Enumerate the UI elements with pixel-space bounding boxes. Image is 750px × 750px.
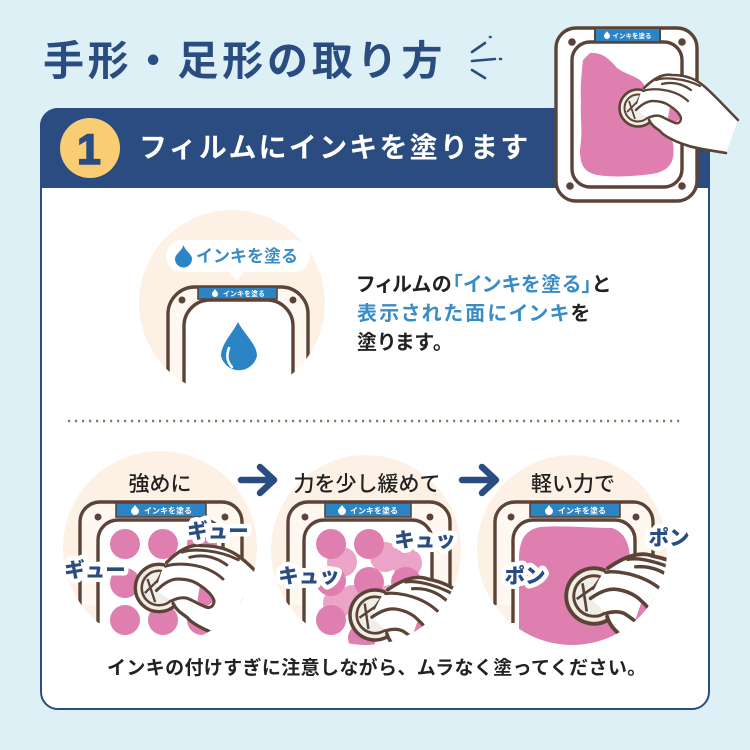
- scene 3: light touch: インキを塗る: [558, 506, 606, 516]
- sound label: kyutt right: キュッ: [394, 529, 456, 552]
- illustration: film with hand applying ink: [556, 28, 738, 201]
- scene 1: press hard: インキを塗る: [144, 506, 192, 516]
- step header band: [40, 108, 710, 188]
- title: 手形・足形の取り方: [43, 38, 446, 84]
- illustration: ink side of the film: [139, 210, 325, 400]
- panel: step 1: [41, 109, 709, 709]
- illustration: ink side of the film: インキを塗る: [223, 289, 265, 298]
- scene 3: light touch: [477, 455, 667, 645]
- sound label: pon right: ポン: [648, 527, 690, 550]
- description text: フィルムの「インキを塗る」と: [357, 273, 610, 296]
- sound label: gyuu left: ギュー: [64, 559, 126, 582]
- scene 2: ease off: インキを塗る: [350, 506, 398, 516]
- scene 2 heading: 力を少し緩めて: [294, 473, 440, 496]
- speech bubble: apply ink label: インキを塗る: [196, 247, 298, 266]
- arrow: [462, 467, 496, 493]
- step number badge: [60, 118, 120, 178]
- arrow: [241, 467, 274, 493]
- description text: [357, 273, 610, 354]
- scene 2: ease off: [271, 455, 461, 645]
- sound label: pon left: ポン: [504, 565, 546, 588]
- scene 1 heading: 強めに: [128, 473, 192, 496]
- scene 1: press hard: [63, 451, 257, 635]
- scene 3 heading: 軽い力で: [531, 473, 615, 496]
- step heading: フィルムにインキを塗ります: [139, 132, 530, 163]
- description text: 塗ります。: [357, 331, 444, 354]
- caption: インキの付けすぎに注意しながら、ムラなく塗ってください。: [107, 656, 647, 679]
- illustration: film with hand applying ink: インキを塗る: [612, 31, 652, 40]
- step number badge: 1: [77, 126, 101, 174]
- icon: emphasis strokes: [472, 37, 501, 78]
- speech bubble: apply ink label: [166, 240, 310, 281]
- sound label: gyuu right: ギュー: [187, 520, 249, 543]
- sound label: kyutt left: キュッ: [278, 565, 340, 588]
- description text: 表示された面にインキを: [357, 302, 592, 325]
